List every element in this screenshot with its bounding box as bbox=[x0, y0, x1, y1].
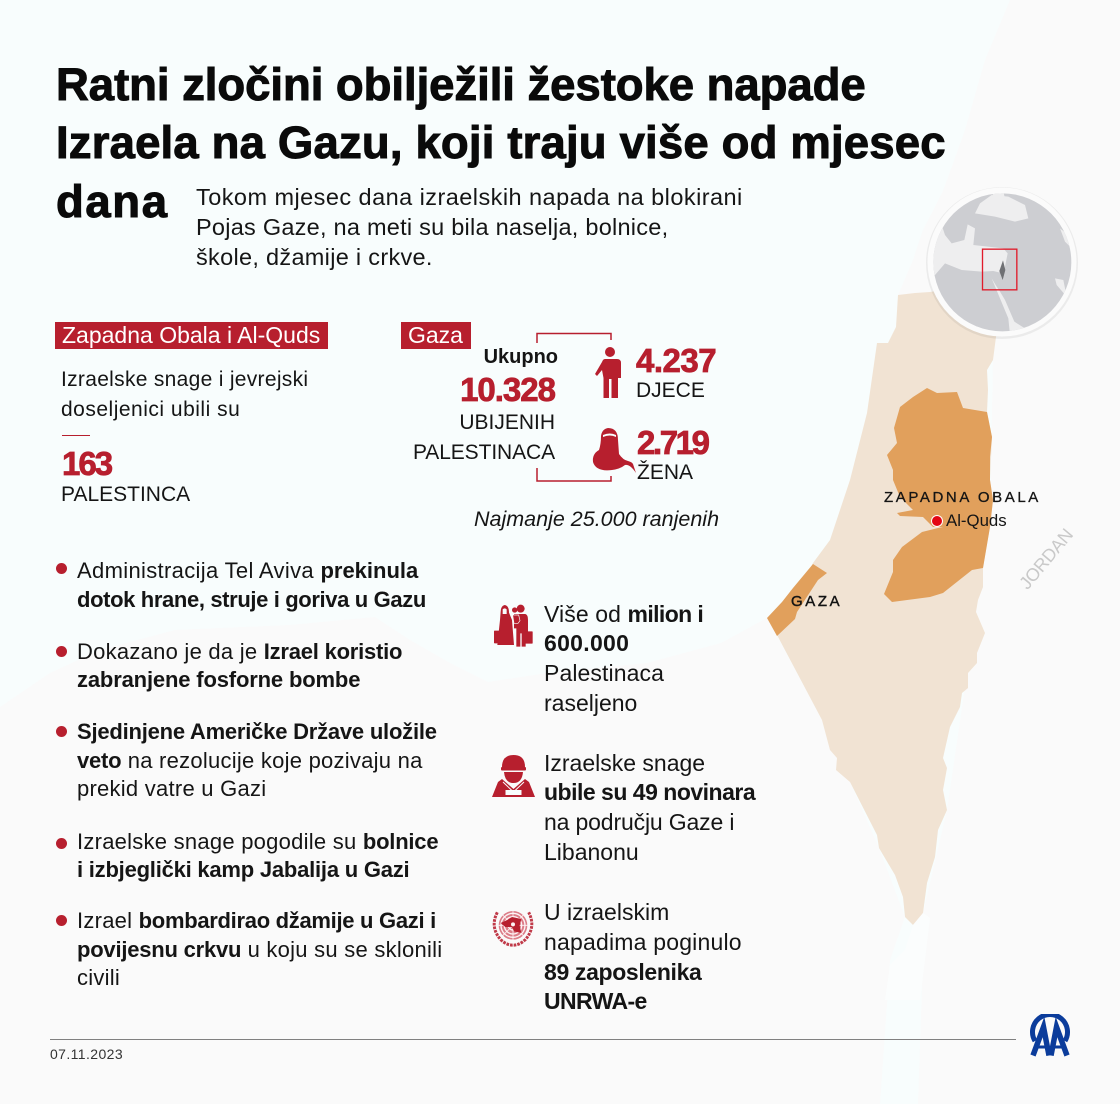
red sea bbox=[992, 279, 1024, 331]
text: journalists: ubile su 49 novinara bbox=[544, 779, 755, 805]
text: UNRWA bbox=[544, 899, 742, 1014]
text: displaced: Više od milion i bbox=[544, 601, 703, 627]
bullet 1: Administracija Tel Aviva prekinula bbox=[77, 558, 418, 583]
black sea bbox=[975, 195, 1028, 222]
top left bbox=[925, 185, 955, 228]
panel: West Bank stat: Izraelske snage i jevrejski bbox=[61, 368, 308, 391]
panel: Gaza total: 10.328 bbox=[460, 371, 555, 408]
panel: Gaza total: UBIJENIH bbox=[459, 411, 555, 434]
label: Al-Quds: Al-Quds bbox=[946, 511, 1007, 530]
stat: children: 4.237 bbox=[636, 342, 716, 379]
footer rule bbox=[50, 1039, 1016, 1040]
wounded note: Najmanje 25.000 ranjenih bbox=[474, 507, 719, 531]
stat: women: 2.719 bbox=[637, 424, 708, 461]
text: UNRWA: U izraelskim bbox=[544, 899, 669, 925]
stat: children bbox=[636, 342, 716, 402]
intro text: škole, džamije i crkve. bbox=[196, 244, 433, 270]
icon: UN emblem bbox=[492, 911, 534, 947]
bullet 4: Izraelske snage pogodile su bolnice bbox=[77, 829, 438, 854]
label: Gaza: GAZA bbox=[791, 593, 842, 610]
map: Gulf of Aqaba bbox=[885, 913, 930, 1000]
bullet 2 bbox=[56, 639, 402, 692]
map: West Bank bbox=[884, 388, 993, 602]
bullet 2: zabranjene fosforne bombe bbox=[77, 667, 360, 692]
stat: children: DJECE bbox=[636, 379, 705, 402]
icon: woman bbox=[592, 428, 636, 473]
bullet 5 bbox=[56, 908, 442, 990]
stat: women bbox=[637, 424, 710, 484]
label: Zapadna Obala: ZAPADNA OBALA bbox=[884, 489, 1041, 506]
caspian bbox=[1060, 228, 1069, 246]
bullet 1 bbox=[56, 558, 426, 612]
marker: Al-Quds bbox=[932, 516, 942, 526]
icon: child bbox=[595, 347, 621, 398]
icon: press bbox=[492, 755, 535, 797]
heading: Gaza: Gaza bbox=[408, 322, 463, 348]
panel: Gaza total bbox=[413, 346, 558, 464]
panel: West Bank stat bbox=[61, 368, 308, 506]
mediterranean bbox=[934, 224, 1008, 275]
map: Gaza strip bbox=[767, 564, 827, 636]
text: UNRWA: UNRWA-e bbox=[544, 988, 647, 1014]
stat: women: ŽENA bbox=[637, 461, 693, 484]
text: journalists: Izraelske snage bbox=[544, 750, 705, 776]
intro text: Pojas Gaze, na meti su bila naselja, bolnice, bbox=[196, 214, 668, 240]
intro text bbox=[196, 184, 743, 270]
text: displaced: raseljeno bbox=[544, 690, 637, 716]
bullet 3: prekid vatre u Gazi bbox=[77, 776, 266, 801]
panel: Gaza total: PALESTINACA bbox=[413, 441, 555, 464]
persian gulf bbox=[1055, 278, 1066, 294]
red locator box bbox=[982, 249, 1017, 290]
bullet 5: Izrael bombardirao džamije u Gazi i bbox=[77, 908, 436, 933]
icon: displaced family bbox=[494, 604, 533, 647]
locator globe bbox=[926, 187, 1078, 339]
title: Ratni zločini obilježili žestoke napade bbox=[56, 59, 866, 110]
heading: Zapadna Obala i Al-Quds: Zapadna Obala i Al-Quds bbox=[62, 322, 320, 348]
title bbox=[56, 59, 946, 227]
bullet 3: veto na rezolucije koje pozivaju na bbox=[77, 748, 423, 773]
bullet 3 bbox=[56, 719, 437, 801]
text: journalists: Libanonu bbox=[544, 839, 639, 865]
text: displaced: Palestinaca bbox=[544, 660, 664, 686]
title: Izraela na Gazu, koji traju više od mjesec bbox=[56, 117, 946, 168]
bracket connector bbox=[536, 332, 612, 482]
date: 07.11.2023 bbox=[50, 1046, 123, 1062]
Israel and Palestine highlight bbox=[999, 260, 1005, 280]
bullet 3: Sjedinjene Američke Države uložile bbox=[77, 719, 437, 744]
text: journalists bbox=[544, 750, 756, 865]
bullet 4: i izbjeglički kamp Jabalija u Gazi bbox=[77, 857, 409, 882]
text: displaced bbox=[544, 601, 703, 716]
text: journalists: na području Gaze i bbox=[544, 809, 734, 835]
intro text: Tokom mjesec dana izraelskih napada na blokirani bbox=[196, 184, 743, 210]
text: displaced: 600.000 bbox=[544, 630, 629, 656]
logo: AA bbox=[1030, 1014, 1070, 1056]
bullet 5: povijesnu crkvu u koju su se sklonili bbox=[77, 937, 442, 962]
panel: West Bank stat: PALESTINCA bbox=[61, 483, 190, 506]
bullet 1: dotok hrane, struje i goriva u Gazu bbox=[77, 587, 426, 612]
panel: West Bank stat: doseljenici ubili su bbox=[61, 398, 240, 421]
text: UNRWA: napadima poginulo bbox=[544, 929, 742, 955]
bullet 4 bbox=[56, 829, 438, 882]
bullet 5: civili bbox=[77, 965, 120, 990]
title: dana bbox=[56, 176, 169, 227]
label: Jordan: JORDAN bbox=[1015, 525, 1077, 593]
map: Israel territory bbox=[777, 280, 1000, 925]
panel: Gaza total: Ukupno bbox=[484, 346, 558, 368]
list: key events bbox=[56, 558, 442, 990]
text: UNRWA: 89 zaposlenika bbox=[544, 959, 701, 985]
panel: West Bank stat: 163 bbox=[62, 445, 111, 482]
bullet 2: Dokazano je da je Izrael koristio bbox=[77, 639, 402, 664]
